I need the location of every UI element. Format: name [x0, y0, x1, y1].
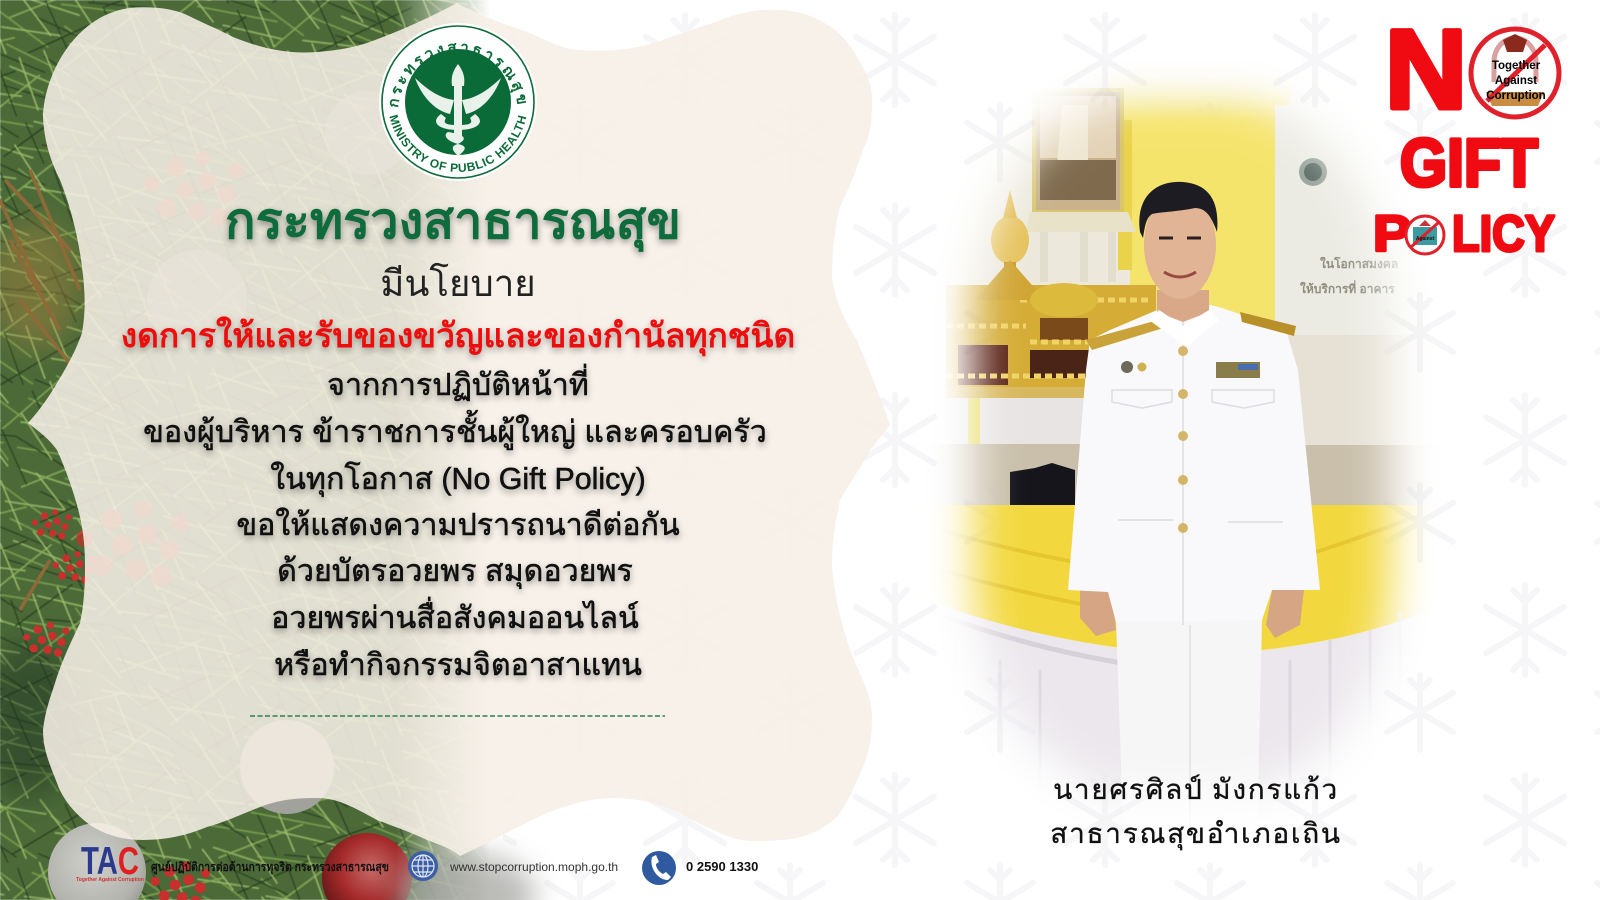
headline: red statement: งดการให้และรับของขวัญและของกำนัลทุกชนิด	[121, 318, 795, 355]
ornament: red ball	[322, 833, 412, 900]
dashed divider	[250, 715, 665, 717]
logo: Ministry of Public Health seal: MINISTRY OF PUBLIC HEALTH	[390, 114, 526, 172]
footer icon: globe	[408, 851, 438, 881]
jacket	[1068, 300, 1320, 622]
photo: officer in white uniform: ในโอกาสมงคล	[1320, 256, 1398, 271]
icon: prohibited gift basket: Corruption	[1486, 90, 1546, 102]
officer name and position: นายศรศิลป์ มังกรแก้ว	[1053, 775, 1339, 806]
grey boards at bottom of fade	[395, 853, 535, 900]
white table skirt	[968, 614, 1422, 790]
black bag	[1010, 463, 1075, 505]
red berries	[23, 151, 243, 900]
icon: prohibited gift basket	[1471, 29, 1559, 117]
pine foliage background	[0, 0, 535, 900]
body text block: จากการปฏิบัติหน้าที่	[327, 368, 589, 402]
icon: no gift policy wordmark: N	[1385, 7, 1467, 132]
icon: no gift policy wordmark: P	[1373, 205, 1411, 262]
altar	[946, 285, 1156, 398]
curtain	[1130, 120, 1275, 320]
icon: prohibited gift box	[1406, 216, 1444, 254]
logo: Ministry of Public Health seal	[379, 23, 537, 181]
logo: Ministry of Public Health seal: กระทรวงสาธารณสุข	[390, 42, 526, 108]
icon: no gift policy wordmark	[1373, 7, 1555, 262]
footer: TAC logo: Together Against Corruption	[76, 877, 144, 883]
footer text: phone number: 0 2590 1330	[686, 859, 758, 874]
icon: no gift policy wordmark: GIFT	[1400, 125, 1538, 201]
body text block: ของผู้บริหาร ข้าราชการชั้นผู้ใหญ่ และครอบครัว	[143, 415, 767, 449]
body text block: ขอให้แสดงความปรารถนาดีต่อกัน	[236, 508, 680, 542]
subtitle: policy: มีนโยบาย	[380, 263, 536, 304]
icon: no gift policy wordmark: LICY	[1452, 205, 1555, 262]
footer icon: phone	[642, 851, 676, 885]
ribbons and badge	[1216, 362, 1260, 378]
buttons	[1178, 346, 1188, 533]
panel: cream ornate card	[28, 3, 890, 856]
officer name and position	[1050, 774, 1342, 850]
officer	[1068, 182, 1320, 792]
caduceus	[415, 64, 501, 156]
photo: officer in white uniform	[940, 74, 1426, 806]
ornaments: silver balls	[48, 91, 409, 900]
white cloth below altar	[946, 398, 1084, 399]
body text block: ด้วยบัตรอวยพร สมุดอวยพร	[277, 554, 633, 588]
trousers	[1116, 620, 1262, 792]
footer text: website: www.stopcorruption.moph.go.th	[450, 860, 618, 874]
body text block: ในทุกโอกาส (No Gift Policy)	[270, 462, 646, 496]
title: กระทรวงสาธารณสุข	[225, 192, 681, 249]
photo: officer in white uniform: ให้บริการที่ อาคาร	[1300, 280, 1395, 296]
footer: TAC logo: TAC	[81, 840, 139, 883]
yellow table	[941, 505, 1424, 650]
banner	[1275, 105, 1290, 320]
body text block: อวยพรผ่านสื่อสังคมออนไลน์	[271, 601, 639, 635]
icon: prohibited gift box: Against	[1416, 236, 1434, 242]
royal portrait	[1034, 90, 1122, 212]
footer text: TAC centre name: ศูนย์ปฏิบัติการต่อต้านการทุจริต กระทรวงสาธารณสุข	[151, 860, 389, 874]
icon: prohibited gift basket: Together	[1492, 60, 1541, 72]
body text block	[141, 364, 769, 682]
body text block: หรือทำกิจกรรมจิตอาสาแทน	[274, 648, 642, 682]
icon: prohibited gift basket: Against	[1495, 75, 1537, 87]
hands	[1080, 590, 1116, 636]
officer name and position: สาธารณสุขอำเภอเถิน	[1050, 819, 1342, 850]
floor	[954, 444, 1410, 505]
neck and face	[1157, 290, 1209, 322]
